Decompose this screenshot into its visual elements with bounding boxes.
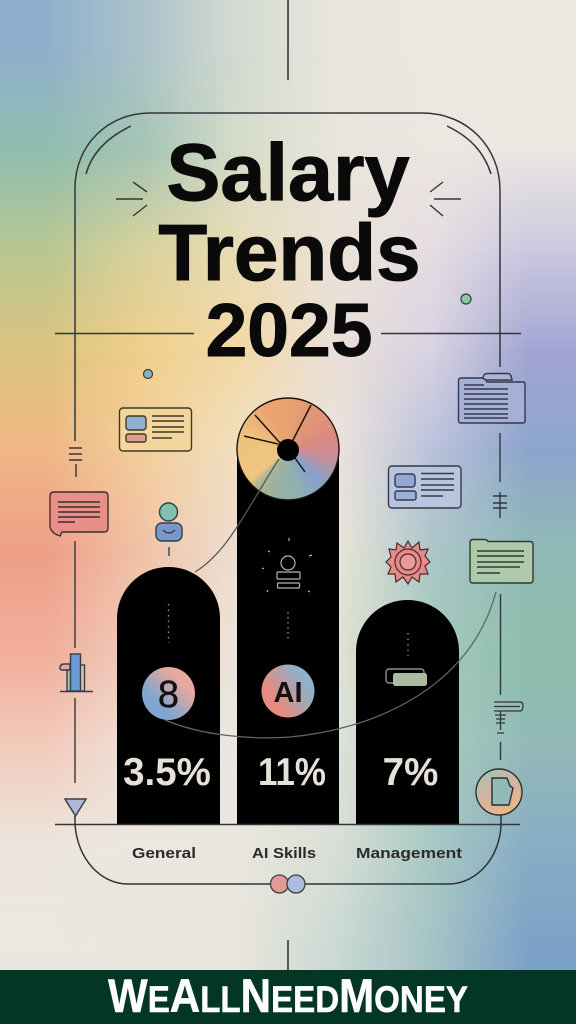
connector dot: blue	[287, 875, 305, 893]
label: General: General	[132, 845, 196, 862]
curve: General to folder	[165, 592, 496, 738]
bar: AI Skills	[237, 398, 339, 824]
footer banner	[0, 970, 576, 1024]
horizontal rule left	[55, 332, 194, 334]
pie wheel	[237, 398, 339, 500]
dotted line bar 3	[407, 633, 409, 656]
dot: green	[461, 294, 471, 304]
value: 3.5%: 3.5%	[123, 751, 211, 794]
circle badge: AI	[262, 664, 314, 718]
icon: info card blue	[388, 466, 461, 508]
value: 7%: 7%	[383, 751, 438, 794]
rounded title frame	[75, 113, 500, 441]
label: AI Skills: AI Skills	[252, 845, 316, 862]
icon: ruler tick	[494, 702, 523, 733]
dotted line bar 1	[168, 604, 170, 643]
icon: chat bubble	[50, 492, 108, 536]
connector dot: pink	[270, 875, 288, 893]
icon: gear	[386, 541, 430, 584]
right rail segments	[493, 433, 507, 760]
bottom bracket curve	[75, 815, 501, 884]
top connector line	[287, 0, 289, 80]
right title burst	[430, 182, 461, 216]
icon: profile card	[120, 408, 192, 451]
icon: person	[156, 503, 182, 556]
icon: lightbulb person on AI bar	[262, 538, 312, 592]
label: Management: Management	[356, 845, 462, 862]
dot: blue	[144, 370, 152, 378]
circle badge: 8	[142, 667, 195, 720]
icon: badge on Management bar	[386, 669, 427, 686]
dotted line bar 2	[287, 612, 289, 640]
horizontal rule right	[381, 332, 521, 334]
icon: folder green	[470, 540, 533, 583]
icon: folder lavender	[458, 374, 525, 423]
circle badge: AI: AI	[274, 677, 302, 709]
icon: document circle	[476, 769, 522, 815]
baseline	[55, 824, 520, 826]
icon: bar chart	[60, 654, 93, 692]
curve: wheel to General bar	[195, 459, 279, 572]
icon: funnel triangle	[65, 799, 86, 816]
value: 11%: 11%	[258, 751, 326, 794]
bar: Management	[356, 600, 459, 824]
bottom connector line	[287, 940, 289, 970]
left title burst	[116, 182, 147, 216]
title: 2025	[206, 288, 372, 372]
title	[158, 128, 421, 372]
title: Trends	[158, 208, 421, 297]
circle badge: 8: 8	[158, 674, 179, 716]
footer brand name: WEALLNEEDMONEY	[108, 969, 468, 1022]
bar: General	[117, 567, 220, 824]
left rail segments	[69, 448, 82, 783]
title: Salary	[166, 128, 410, 218]
